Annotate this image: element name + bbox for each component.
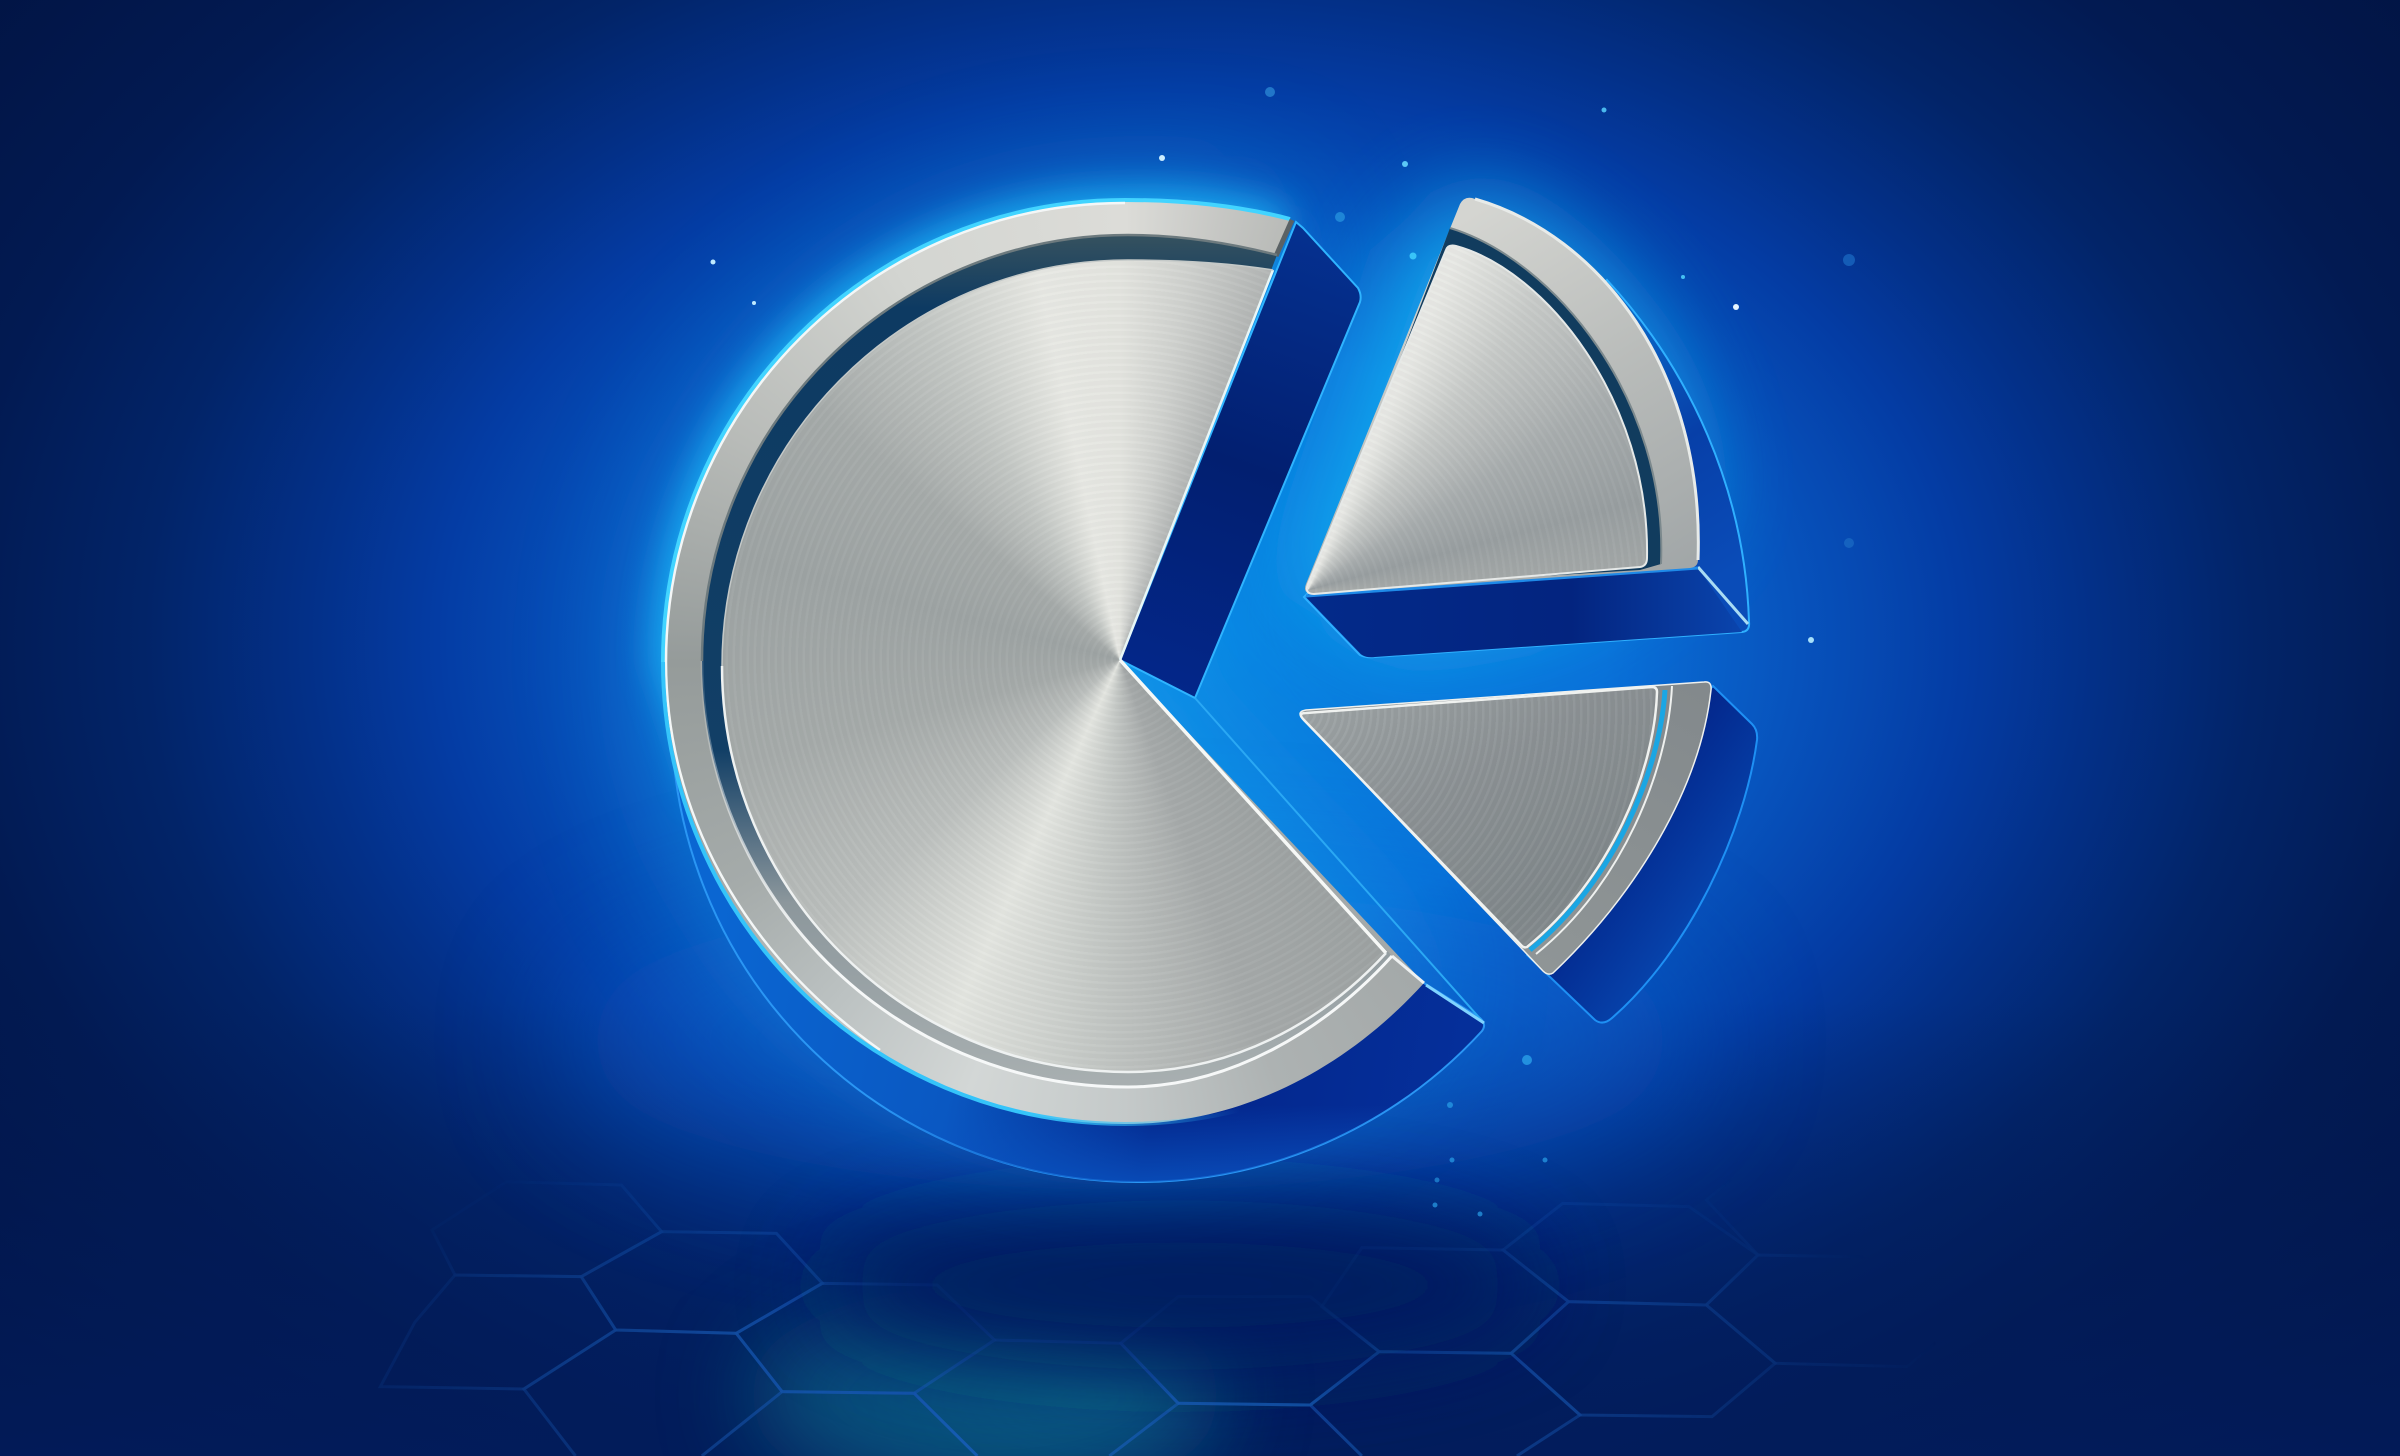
shadow under the pie chart [820,1200,1540,1370]
pie slice: upper right metal sector [1300,198,1749,657]
lower sector: brushed metal face [1296,682,1660,952]
pie slice: lower right metal sector [1296,682,1757,1023]
upper sector: blue extruded side [1304,280,1749,657]
cyan glow behind the pie chart [653,189,1700,1124]
large sector: recessed groove [702,235,1392,1087]
large sector: outer rim [650,190,1440,1135]
upper sector: recessed groove [1312,228,1661,590]
lower sector: outer rim [1300,682,1711,974]
hexagon floor pattern [378,1185,1858,1456]
upper sector: brushed metal face [1300,240,1652,600]
pie slice: large metal sector [650,190,1484,1182]
large sector: blue extruded side [672,222,1484,1182]
large sector: brushed metal face [715,255,1395,1080]
upper sector: outer rim [1305,198,1698,594]
lower sector: blue extruded side [1527,686,1757,1023]
floating light particles [710,87,1855,1216]
